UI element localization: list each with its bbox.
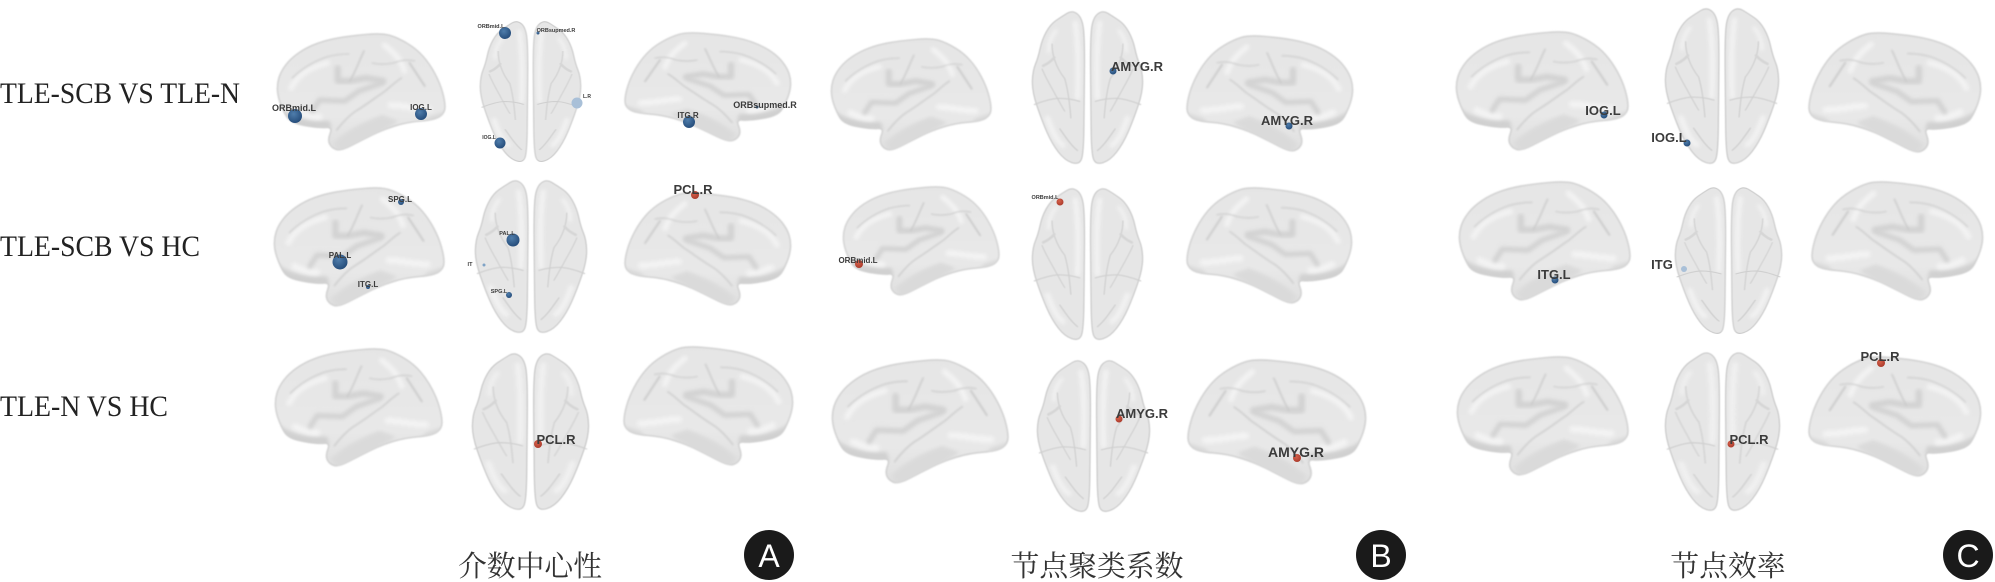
- brain: B row 3 right: [1186, 360, 1366, 487]
- brain: A row 1 right: [623, 33, 797, 144]
- brain: B row 1 right: AMYG.R: [1261, 113, 1314, 128]
- brain: C row 2 top: [1651, 188, 1782, 333]
- brain: B row 3 right: AMYG.R: [1268, 444, 1324, 460]
- brain: C row 2 right: [1810, 182, 1983, 303]
- brain: A row 2 left: ITG.L: [358, 280, 378, 289]
- brain: B row 2 top: ORBmid.L: [1032, 195, 1059, 201]
- brain: C row 1 left: [1456, 32, 1630, 153]
- brain: A row 1 top: ORBsupmed.R: [537, 28, 575, 34]
- brain: A row 2 right: PCL.R: [674, 182, 713, 197]
- badge A: [744, 530, 794, 580]
- brain: C row 3 right: PCL.R: [1860, 349, 1900, 364]
- brain: A row 1 left: IOG.L: [410, 103, 432, 112]
- brain: C row 2 top: ITG: [1651, 257, 1673, 272]
- brain: C row 1 left: IOG.L: [1585, 103, 1621, 118]
- brain: C row 3 right: [1807, 349, 1981, 479]
- brain: B row 3 left: [832, 360, 1010, 486]
- brain: B row 2 left: ORBmid.L: [838, 256, 878, 265]
- brain: A row 3 top: PCL.R: [536, 432, 576, 447]
- brain: B row 2 left: [838, 187, 1001, 298]
- brain: C row 2 left: ITG.L: [1537, 267, 1571, 282]
- brain: C row 3 top: [1665, 353, 1780, 510]
- brain: B row 1 left: [831, 39, 993, 153]
- brain: B row 2 right: [1185, 188, 1352, 306]
- badge B: B: [1370, 538, 1392, 574]
- brain: A row 2 top: SPG.L: [491, 289, 508, 295]
- brain: A row 3 top: [472, 354, 589, 509]
- brain: C row 3 left: [1457, 357, 1630, 478]
- brain: A row 1 top: ORBmid.L: [478, 24, 505, 30]
- badge B: [1356, 530, 1406, 580]
- brain: A row 2 left: PAL.L: [329, 251, 351, 260]
- panel C: nodal efficiency: [1456, 9, 1993, 582]
- brain: A row 2 top: IT: [468, 262, 473, 268]
- brain: A row 1 left: [272, 34, 447, 153]
- badge C: [1943, 530, 1993, 580]
- panel A: betweenness centrality: [272, 22, 797, 582]
- brain: B row 1 right: [1185, 36, 1353, 154]
- brain: A row 2 top: PAL.L: [499, 231, 515, 237]
- row label: TLE-SCB VS TLE-N: TLE-SCB VS TLE-N: [0, 77, 240, 110]
- brain: A row 3 right: [622, 347, 793, 468]
- brain: C row 1 top: IOG.L: [1651, 130, 1687, 145]
- brain: C row 2 left: [1459, 182, 1632, 303]
- row label: TLE-SCB VS HC: TLE-SCB VS HC: [0, 230, 200, 263]
- brain: A row 1 left: ORBmid.L: [272, 103, 317, 113]
- brain: A row 2 top: [468, 181, 587, 332]
- brain: B row 2 top: [1032, 189, 1143, 339]
- brain: A row 1 right: ITG.R: [677, 111, 699, 120]
- panel B: nodal clustering coefficient: [831, 12, 1406, 582]
- brain: C row 3 top: PCL.R: [1730, 432, 1769, 447]
- brain: A row 2 left: SPG.L: [388, 195, 412, 204]
- brain: A row 3 left: [275, 349, 444, 469]
- brain: B row 3 top: [1037, 361, 1169, 511]
- brain: B row 3 top: AMYG.R: [1116, 406, 1169, 421]
- row label: TLE-N VS HC: TLE-N VS HC: [0, 390, 168, 423]
- brain: A row 1 right: ORBsupmed.R: [733, 100, 797, 110]
- brain: A row 1 top: [478, 22, 591, 161]
- badge C: C: [1956, 538, 1980, 574]
- brain: C row 1 right: [1807, 33, 1981, 155]
- brain: A row 2 left: [274, 188, 446, 309]
- brain: A row 1 top: L.R: [583, 94, 591, 100]
- brain: A row 1 top: IOG.L: [482, 135, 496, 141]
- badge A: A: [758, 538, 780, 574]
- brain: B row 1 top: [1032, 12, 1164, 163]
- brain: B row 1 top: AMYG.R: [1111, 59, 1164, 74]
- brain: A row 2 right: [623, 182, 791, 308]
- brain: C row 1 top: [1651, 9, 1779, 163]
- row labels: [0, 77, 240, 423]
